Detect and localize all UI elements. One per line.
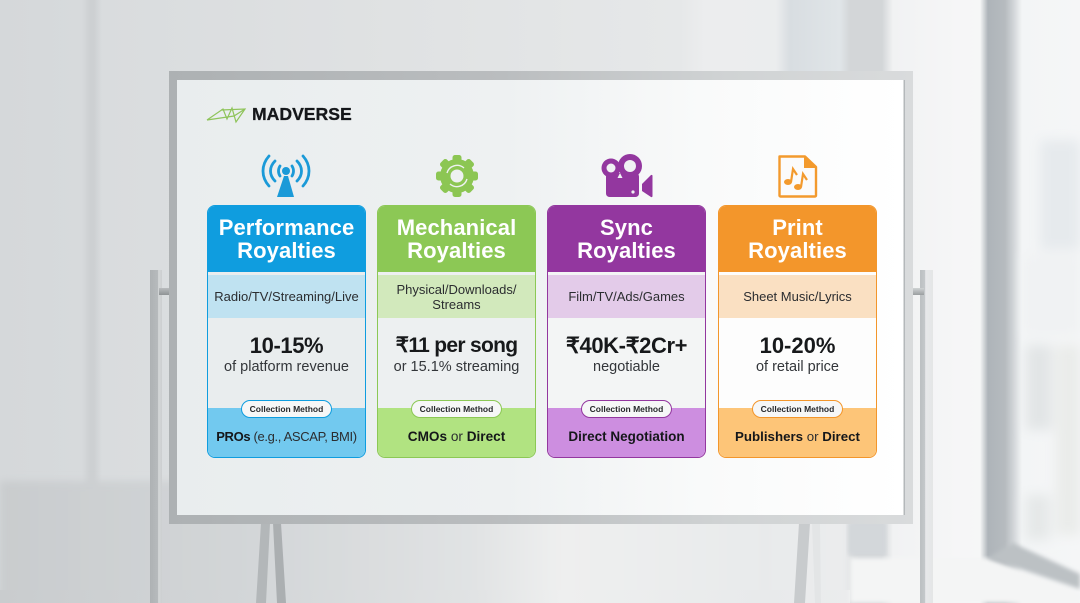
stand: left post [150,270,162,603]
stand: right bracket [913,288,924,295]
rate note: negotiable [593,359,660,375]
sources [378,275,535,318]
sources: Streams [432,296,481,312]
sources [208,275,365,318]
heading: Performance [219,215,354,240]
collection [207,408,366,458]
collection badge: Collection Method [250,404,323,414]
rate: 10-15% [250,333,323,358]
sources: Sheet Music/Lyrics [743,289,852,304]
sources: Film/TV/Ads/Games [568,289,685,304]
panel: performance royalties [207,205,366,458]
rate: ₹40K-₹2Cr+ [566,333,687,358]
heading: Royalties [407,238,506,263]
collection badge: Collection Method [590,404,663,414]
heading: Royalties [748,238,847,263]
collection [377,408,536,458]
whiteboard frame [169,71,913,524]
collection badge [752,400,843,418]
collection: Publishers or Direct [735,429,860,444]
icon: movie camera [602,154,652,198]
heading: Print [772,215,823,240]
heading: Sync [600,215,653,240]
sources [548,275,705,318]
heading: Mechanical [397,215,516,240]
icon: logo wave [206,106,246,124]
icon: sheet music file [778,155,818,198]
heading [377,205,536,272]
heading: Royalties [237,238,336,263]
logo: Madverse [206,104,352,124]
collection: Direct Negotiation [568,429,685,444]
rate note: or 15.1% streaming [394,359,519,375]
collection: CMOs or Direct [408,429,505,444]
collection badge [411,400,502,418]
heading: Royalties [577,238,676,263]
collection [718,408,877,458]
rate: 10-20% [760,333,835,358]
rate: ₹11 per song [396,334,517,357]
collection: PROs (e.g., ASCAP, BMI) [216,429,357,444]
heading [718,205,877,272]
collection [547,408,706,458]
sources [719,275,876,318]
panel: mechanical royalties [377,205,536,458]
rate note: of retail price [756,359,839,375]
collection badge: Collection Method [761,404,834,414]
sources: Physical/Downloads/ [397,282,516,296]
heading [547,205,706,272]
panel: print royalties [718,205,877,458]
collection badge: Collection Method [420,404,493,414]
rate note: of platform revenue [224,359,349,375]
sources: Radio/TV/Streaming/Live [214,289,359,304]
collection badge [581,400,672,418]
whiteboard surface [177,80,905,515]
icon: broadcast antenna [262,154,310,197]
wordmark: MADVERSE [252,104,352,124]
panel: sync royalties [547,205,706,458]
icon: gear [436,155,478,197]
stand: right post [920,270,933,603]
collection badge [241,400,332,418]
stand: left bracket [159,288,169,295]
heading [207,205,366,272]
